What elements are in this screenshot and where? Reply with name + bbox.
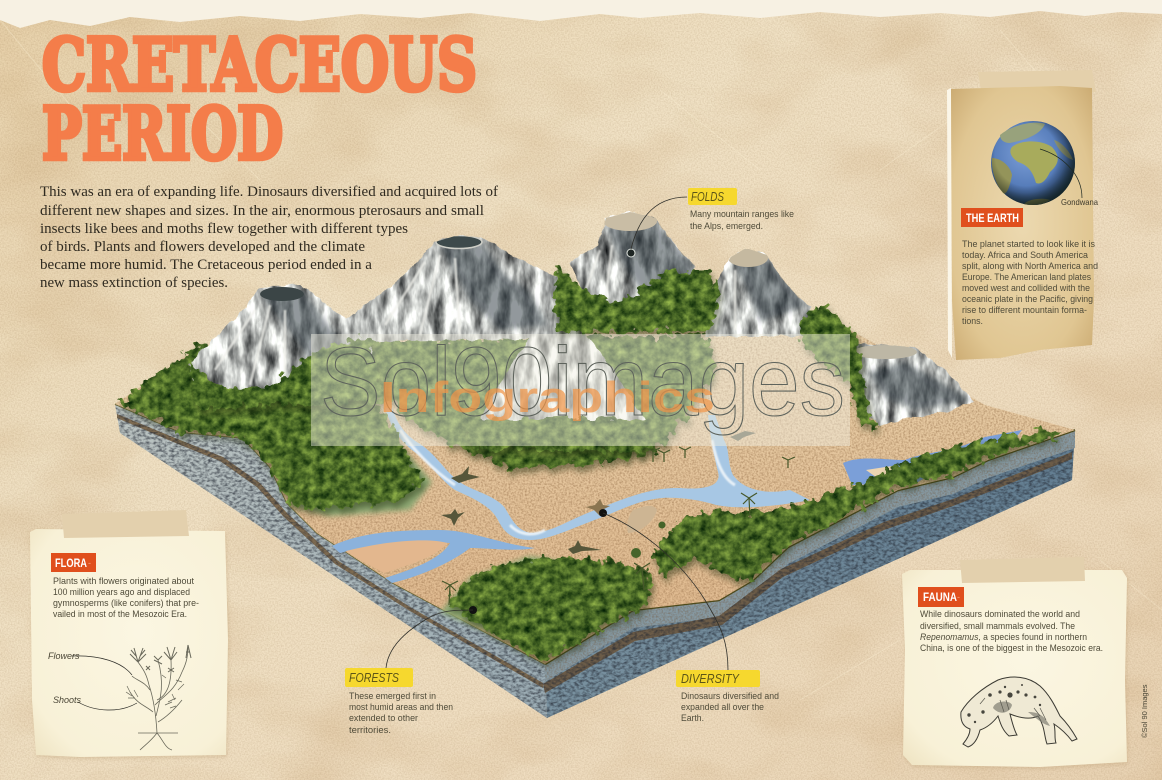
intro text	[40, 184, 498, 291]
rivers	[332, 408, 1022, 583]
labels: flowers and shoots: Shoots	[53, 695, 82, 705]
text: flora: vailed in most of the Mesozoic Era.	[53, 609, 187, 620]
heading: flora	[51, 553, 96, 572]
mountain shading and craters	[215, 211, 972, 420]
3D terrain block	[115, 211, 1075, 718]
text: the earth: today. Africa and South America	[962, 250, 1089, 261]
callout: diversity: expanded all over the	[681, 702, 764, 713]
heading: the earth	[961, 208, 1023, 227]
mountain ranges	[188, 212, 974, 425]
callout: folds	[631, 188, 794, 249]
forest slopes in front of mountains	[183, 266, 880, 452]
intro text: insects like bees and moths flew together with different types	[40, 221, 408, 237]
text: the earth: The planet started to look like it is	[962, 239, 1095, 250]
isolated tree clumps	[631, 522, 666, 558]
text: flora: gymnosperms (like conifers) that pre-	[53, 598, 199, 609]
callout: diversity: Earth.	[681, 713, 704, 724]
intro text: new mass extinction of species.	[40, 275, 228, 291]
text: fauna: While dinosaurs dominated the world and	[920, 609, 1080, 620]
labels: flowers and shoots: Flowers	[48, 651, 80, 661]
text: the earth	[962, 239, 1098, 327]
callout dots	[469, 249, 635, 614]
illustration: flowering plant	[126, 645, 191, 750]
text: flora: Plants with flowers originated about	[53, 576, 194, 587]
callout: diversity	[603, 513, 779, 724]
tape	[978, 70, 1096, 97]
text: the earth: rise to different mountain forma-	[962, 305, 1087, 316]
intro text: of birds. Plants and flowers developed and the climate	[40, 239, 365, 255]
callout: forests: These emerged first in	[349, 691, 436, 702]
credit: ©Sol 90 Images	[1140, 684, 1149, 738]
intro text: became more humid. The Cretaceous period ended in a	[40, 257, 372, 273]
callout: forests: extended to other	[349, 713, 419, 724]
text: fauna	[920, 609, 1103, 654]
panel: fauna	[902, 557, 1128, 769]
title	[42, 22, 477, 176]
watermark: Infographics	[380, 373, 715, 422]
panel: flora	[30, 510, 229, 759]
palm trees	[442, 447, 795, 605]
Gondwana label: Gondwana	[1061, 197, 1098, 207]
tape	[62, 510, 189, 538]
intro text: This was an era of expanding life. Dinosaurs diversified and acquired lots of	[40, 184, 498, 200]
text: the earth: split, along with North America and	[962, 261, 1098, 272]
Gondwana label	[1040, 149, 1098, 207]
left rock face	[115, 404, 547, 718]
callout: forests: FORESTS	[349, 671, 400, 685]
heading: fauna: -	[957, 592, 960, 602]
title: PERIOD	[42, 91, 283, 176]
labels: flowers and shoots	[48, 651, 137, 710]
callout: diversity: DIVERSITY	[681, 672, 740, 686]
terrain surface	[115, 330, 1075, 664]
callout: folds: the Alps, emerged.	[690, 221, 763, 232]
callout: forests: most humid areas and then	[349, 702, 453, 713]
intro text: different new shapes and sizes. In the air, enormous pterosaurs and small	[40, 203, 484, 219]
heading: the earth: THE EARTH	[966, 213, 1019, 225]
callout: forests: territories.	[349, 725, 391, 736]
pterosaurs and dinosaurs	[441, 431, 756, 554]
text: the earth: moved west and collided with the	[962, 283, 1090, 294]
illustration: Repenomamus	[961, 677, 1077, 747]
text: fauna: Repenomamus, a species found in northern	[920, 632, 1087, 643]
watermark: Sol90images	[320, 327, 845, 436]
light green forest floor	[290, 410, 645, 656]
text: flora	[53, 576, 199, 620]
callout: folds: FOLDS	[691, 190, 725, 204]
heading: fauna: FAUNA	[923, 592, 957, 604]
title: CRETACEOUS	[42, 22, 477, 107]
text: flora: 100 million years ago and displaced	[53, 587, 190, 598]
forests	[117, 335, 1064, 662]
text: the earth: oceanic plate in the Pacific, giving	[962, 294, 1093, 305]
icon: globe	[991, 121, 1075, 205]
right rock face	[543, 430, 1075, 718]
text: fauna: China, is one of the biggest in the Mesozoic era.	[920, 643, 1103, 654]
panel: the earth	[947, 70, 1098, 360]
heading: flora: -	[88, 558, 91, 568]
text: the earth: tions.	[962, 316, 983, 327]
text: fauna: diversified, small mammals evolved. The	[920, 621, 1075, 632]
callout: folds: Many mountain ranges like	[690, 209, 794, 220]
heading: flora: FLORA	[55, 558, 87, 570]
callout: forests	[345, 610, 473, 736]
callout: diversity: Dinosaurs diversified and	[681, 691, 779, 702]
torn paper top edge	[0, 0, 1162, 28]
text: the earth: Europe. The American land plates	[962, 272, 1091, 283]
heading: fauna	[918, 587, 964, 607]
tape	[960, 557, 1085, 583]
